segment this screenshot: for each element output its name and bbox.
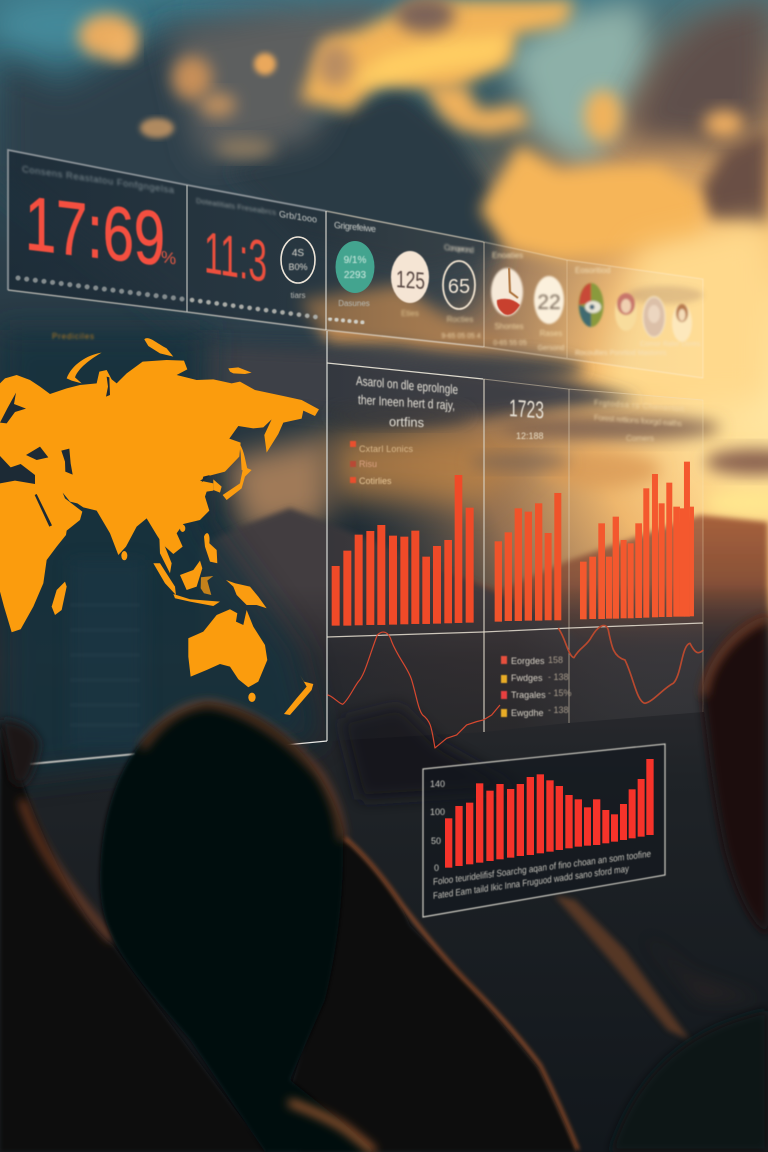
KPI 8: colour pie [578,283,604,327]
KPI 2: time and ring: 11:3 [204,220,267,295]
axis labels: 0 [434,863,439,873]
island: Java [173,594,220,606]
KPI 6: clock gauge [491,251,527,347]
island: Sumatra [153,563,176,595]
right brown cloud [625,0,768,150]
panel: charts [327,331,703,748]
Eurasia and Africa landmass [0,360,319,632]
KPI 2: time and ring: tiars [290,291,306,300]
lower legend: - 15% [548,688,572,698]
island: Philippines [204,533,217,563]
avatar icons row: Rocoulties Ponrtiod Mastonrs [575,350,667,357]
KPI 2: time and ring: Grb/1ooo [279,209,317,225]
island: New Guinea [226,580,267,608]
panel: world map [0,332,327,764]
axis labels [430,779,445,873]
value 1723: 12:188 [516,431,544,441]
chart heading: Asarol on dle eprolngle [356,373,458,397]
KPI 3: teal circle [330,220,376,323]
avatar icons row: Comor Raler Dores [640,341,701,348]
bright cloud top-left [78,14,138,58]
low golden bank [480,145,700,260]
KPI 4: 125 badge: Eties [401,309,419,318]
bar chart 2 [495,493,561,622]
panel: top KPI strip [8,150,703,378]
island: Malay peninsula [159,537,172,573]
axis labels: 140 [430,779,445,789]
centre viewer raised arm [290,835,578,1152]
faded panel text: Frgtodsa rs Chenertoit [594,398,685,413]
avatar icons row [575,266,703,357]
island: Madagascar [52,582,67,615]
lower legend: Tragales [511,690,546,700]
faded panel text: Comers [626,434,654,443]
island: New Zealand [284,675,313,715]
chart heading: ortfins [389,414,424,430]
line chart [327,625,703,748]
avatar icons row: Eosoritiod [575,266,611,275]
right viewer shoulder [610,1010,768,1152]
arm rim light [345,838,578,1150]
lower legend: - 138 [548,672,569,682]
KPI 2: time and ring [192,196,317,317]
KPI 5: ring 65 [441,243,481,340]
main golden cloud [300,0,575,112]
island: New Siberian [228,367,252,374]
bars [445,759,654,868]
clouds [0,0,768,535]
chart legend: Cotirlies [359,476,392,486]
KPI 5: ring 65: 65 [448,276,470,298]
KPI 3: teal circle: Grigrefeiwe [334,220,376,234]
panel: bottom bar chart [423,744,665,917]
caption: Foloo teuridelifisf Soarchg aqan of fino choan an som toofine [433,849,651,888]
centre viewer hair rim light [142,704,342,840]
island: Japan [223,467,252,500]
island: Borneo [180,561,202,590]
KPI 5: ring 65: 9-65 05 05 4 [441,333,481,340]
KPI 3: teal circle: 2293 [344,270,367,281]
KPI 1: clock value [18,164,182,299]
island: Novaya Zemlya [67,353,102,383]
axis labels: 50 [431,836,441,846]
left viewer rim light [22,800,112,940]
KPI 7: 22 badge: Rases [540,329,562,338]
chart legend: Risu [359,459,377,469]
KPI 5: ring 65: Conqerond [444,243,474,255]
KPI 6: clock gauge: Enoaties [492,251,523,260]
KPI 1: clock value: Consens Reastatou Fonfgngelsa [22,164,175,196]
lower legend: Eorgdes [511,656,545,666]
value 1723: 1723 [509,395,544,424]
KPI 6: clock gauge: Shontes [494,322,524,331]
KPI 1: clock value: % [161,246,176,269]
KPI 6: clock gauge: 0-65 55 05 [493,340,527,347]
people silhouettes [0,615,768,1152]
KPI 4: 125 badge [391,251,429,318]
map: Asia, Africa, Oceania [0,338,319,715]
KPI 3: teal circle: Dasunes [338,299,370,308]
chart heading [356,373,458,430]
KPI 5: ring 65: Rocties [447,315,473,324]
centre viewer head and body [100,703,375,1152]
faded panel text: Forest rettions foorgd eaiths [594,413,682,428]
island: Sri Lanka [121,551,127,560]
blurred map text: Prediciles [52,332,94,341]
bar chart 1 [332,475,474,626]
island: Sakhalin [239,443,248,472]
chart heading: ther Ineen hert d rajy, [358,392,455,413]
KPI 2: time and ring: B0% [288,262,308,272]
bar chart 3 [580,462,694,619]
lower legend: Ewgdhe [511,708,544,718]
KPI 2: time and ring: Doteatitiats Freseabrcs [196,196,276,217]
caption: Fated Eam taild Ikic Inna Fruguod wadd sano sford may [433,864,629,902]
seas and gulfs cut-outs [0,377,210,527]
chart legend: Cxtarl Lonics [359,444,414,454]
axis labels: 100 [430,807,445,817]
lower legend: 158 [548,655,563,665]
right viewer rim light [704,618,768,695]
chart legend [350,441,414,486]
right viewer [702,615,768,935]
KPI 7: 22 badge: Gersond [538,345,565,352]
island: Hainan [180,525,185,532]
continent: Australia [188,609,267,687]
island: Tasmania [248,693,256,702]
island: Severnaya Zemlya [144,338,173,357]
KPI 3: teal circle: 9/1% [344,255,367,266]
island: Sulawesi [201,576,213,595]
value 1723 [509,395,544,441]
KPI 7: 22 badge: 22 [537,291,561,314]
KPI 1: clock value: 17:69 [25,181,165,283]
left viewer raised hand [0,720,40,785]
mountain silhouette [0,330,768,1152]
lower legend: Fwdges [511,673,543,683]
shoulder rim light [289,1102,374,1152]
KPI 4: 125 badge: 125 [396,266,425,295]
faded panel text [594,398,685,443]
KPI 7: 22 badge [534,276,565,352]
lower legend [501,655,572,718]
left viewer [0,720,268,1152]
KPI 2: time and ring: 4S [292,248,304,259]
faded data table [70,605,140,725]
lower legend: - 138 [548,705,569,715]
island: Korea [213,479,222,493]
